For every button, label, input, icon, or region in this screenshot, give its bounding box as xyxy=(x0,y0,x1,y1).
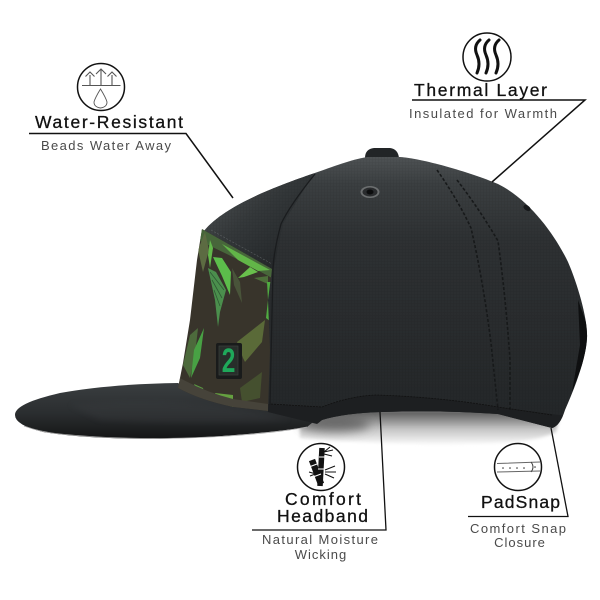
badge xyxy=(216,342,242,380)
leader line xyxy=(29,134,233,198)
subtext: Beads Water Away xyxy=(41,138,172,153)
rear snap xyxy=(522,204,532,212)
icon: water and arrows xyxy=(78,64,124,110)
subtext: Insulated for Warmth xyxy=(409,106,557,121)
icon: strap xyxy=(494,444,542,490)
subtext: Comfort Snap xyxy=(470,521,566,536)
eyelet xyxy=(360,186,380,198)
brim xyxy=(15,383,318,439)
fern print panel xyxy=(178,228,272,411)
callout: thermal layer xyxy=(409,33,585,182)
callout: comfort headband: Wicking xyxy=(295,547,347,562)
heading: Thermal Layer xyxy=(414,80,547,100)
heading: PadSnap xyxy=(481,492,560,512)
badge: 2 xyxy=(222,342,235,380)
leader line xyxy=(468,428,568,516)
band shade xyxy=(268,395,563,428)
hat illustration xyxy=(15,148,600,444)
heading: Comfort xyxy=(285,489,361,509)
icon: heat waves xyxy=(463,33,511,81)
callout: comfort headband xyxy=(252,412,386,562)
leader line xyxy=(412,100,585,182)
callout: padsnap: Closure xyxy=(494,535,546,550)
heading: Water-Resistant xyxy=(35,112,183,132)
leader line xyxy=(252,412,386,530)
crown xyxy=(204,157,588,428)
callout: padsnap xyxy=(468,428,568,550)
seams xyxy=(270,174,315,405)
hat button xyxy=(365,148,399,158)
callout: water resistant xyxy=(29,64,233,198)
icon: bamboo xyxy=(298,444,344,490)
subtext: Natural Moisture xyxy=(262,532,378,547)
front panel xyxy=(204,173,314,240)
callout: comfort headband: Headband xyxy=(277,506,368,526)
shadow under hat xyxy=(300,410,560,444)
